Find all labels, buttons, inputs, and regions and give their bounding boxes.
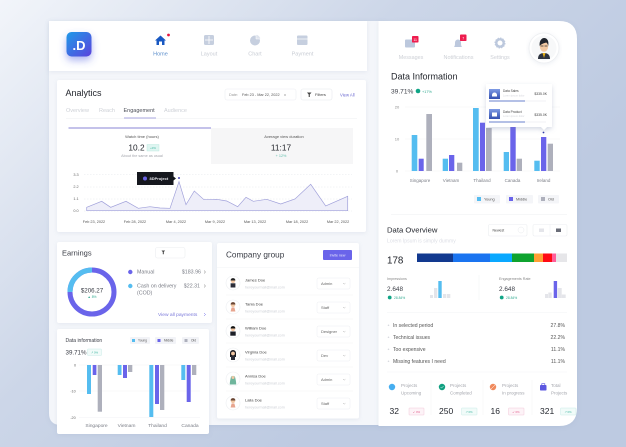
- bar chart: data information: Singapore: [410, 178, 431, 183]
- project stat: completed: 250: [439, 406, 453, 416]
- heading: earnings: Earnings: [62, 248, 92, 258]
- member: Annisa Doe: hereyourmail@mail.com: [245, 382, 285, 386]
- member: James Doe: hereyourmail@mail.com: [245, 286, 285, 290]
- bar chart: data information: 20: [395, 104, 400, 110]
- member: Virginia Doe: Dev: [321, 353, 328, 358]
- line chart: Feb 23, 2022: [83, 220, 105, 224]
- line chart: 0.0: [73, 209, 79, 213]
- project stat: in progress: 16: [490, 406, 500, 416]
- earnings filter: [156, 248, 185, 258]
- negative bar chart: Singapore: [85, 423, 108, 429]
- filters button: [301, 89, 332, 100]
- stat: engagements rate: 2.648: [499, 286, 515, 293]
- reasons list: 22.2%: [551, 335, 565, 341]
- nav item: payment: [292, 36, 314, 58]
- negative bar chart: Vietnam: [118, 423, 135, 429]
- panel: data information small: [57, 329, 209, 434]
- logo: [66, 32, 92, 56]
- member: James Doe: Admin: [321, 281, 332, 286]
- stat: impressions: 28.84%: [394, 296, 405, 300]
- member: William Doe: Designer: [321, 329, 338, 334]
- reasons list: [388, 323, 565, 365]
- metric: average view duration: Average view duration: [264, 134, 304, 139]
- icon: messages: [399, 36, 424, 61]
- data product row: [489, 109, 548, 122]
- legend: Young: [138, 339, 147, 343]
- filters button: Filters: [315, 92, 326, 97]
- nav item: payment: Payment: [292, 52, 314, 58]
- right sidebar panel: [378, 21, 577, 426]
- heading: Data Overview: [387, 226, 438, 234]
- bar chart: data information: Ireland: [537, 178, 551, 183]
- nav item: home: Home: [153, 52, 168, 58]
- data sales row: $335.0K: [534, 92, 548, 96]
- icon: notifications: Notifications: [444, 55, 474, 61]
- negative bar chart: Canada: [181, 423, 199, 429]
- bar chart: data information: Vietnam: [443, 178, 459, 183]
- metric: watch time: 10.2: [128, 142, 145, 152]
- line chart: Mar 13, 2022: [244, 220, 266, 224]
- member: Annisa Doe: Annisa Doe: [245, 374, 266, 378]
- icon: messages: Messages: [399, 55, 424, 61]
- line chart: Feb 28, 2022: [124, 220, 146, 224]
- view toggle: [533, 224, 567, 236]
- stat: impressions: [387, 277, 450, 300]
- data product row: Data Product: [503, 110, 522, 114]
- earnings legend: $22.31: [184, 284, 200, 290]
- member: Tania Doe: Tania Doe: [245, 302, 264, 306]
- member: Laila Doe: Laila Doe: [245, 398, 263, 402]
- chart legend: [474, 195, 559, 204]
- metric: average view duration: + 12%: [276, 154, 287, 158]
- legend: Old: [191, 339, 196, 343]
- project stat: completed: [439, 383, 477, 416]
- reasons list: Missing features I need: [393, 359, 446, 365]
- invite button: [323, 250, 352, 260]
- tabs: Audience: [164, 108, 187, 114]
- member: Laila Doe: Staff: [321, 401, 330, 406]
- heading: Data information: [66, 338, 102, 344]
- tabs: Engagement: [124, 108, 155, 114]
- sort dropdown: [488, 224, 527, 236]
- invite button: Invite new: [330, 254, 346, 258]
- donut chart: $206.27: [81, 288, 104, 294]
- member: Virginia Doe: [226, 348, 350, 362]
- nav item: layout: Layout: [201, 52, 218, 58]
- member: James Doe: James Doe: [245, 278, 266, 282]
- project stat: in progress: [490, 383, 525, 416]
- stat: impressions: 2.648: [387, 286, 403, 293]
- percent value: ↗ 0%: [91, 350, 99, 354]
- project stat: total: 321: [540, 406, 554, 416]
- project stat: total: Projects: [551, 390, 568, 396]
- project stat: total: Total: [551, 383, 561, 388]
- member: William Doe: hereyourmail@mail.com: [245, 334, 285, 338]
- bar chart: data information: 0: [396, 168, 399, 174]
- member: Tania Doe: hereyourmail@mail.com: [245, 310, 285, 314]
- project stat: in progress: Projects: [502, 383, 519, 388]
- data sales row: Lorem ipsum dolor: [503, 94, 525, 98]
- user avatar: [529, 33, 559, 63]
- stat: engagements rate: 28.84%: [506, 296, 517, 300]
- earnings legend: Cash on delivery: [137, 284, 177, 290]
- heading: analytics: Analytics: [66, 88, 102, 98]
- chart tooltip: 8DProject: [150, 176, 169, 181]
- subtitle: Lorem Ipsum is simply dummy: [387, 238, 456, 244]
- chart legend: Old: [548, 198, 554, 202]
- chart legend: Middle: [516, 198, 527, 202]
- donut chart: [70, 270, 114, 314]
- date picker: Feb 23 - Mar 22, 2022: [242, 93, 280, 97]
- negative bar chart: [70, 364, 200, 429]
- project stat: upcoming: Upcoming: [401, 390, 422, 396]
- member: Annisa Doe: [226, 372, 350, 386]
- member: Tania Doe: Staff: [321, 305, 330, 310]
- nav item: chart: Chart: [248, 52, 262, 58]
- data sales row: Data Sales: [503, 89, 519, 93]
- line chart: Mar 9, 2022: [205, 220, 225, 224]
- member: Laila Doe: [226, 396, 350, 410]
- bar chart: data information: 10: [395, 136, 400, 142]
- stat: engagements rate: Engagements Rate: [499, 277, 531, 281]
- legend: [130, 337, 199, 344]
- panel: analytics: [57, 80, 366, 232]
- negative bar chart: 0: [74, 364, 76, 368]
- metric: average view duration: 11:17: [271, 142, 291, 152]
- chart tooltip: [137, 172, 180, 185]
- bar chart: data information: Canada: [505, 178, 521, 183]
- view all payments link: View all payments: [158, 312, 198, 318]
- member: Virginia Doe: Virginia Doe: [245, 350, 267, 354]
- member: Annisa Doe: Admin: [321, 377, 332, 382]
- view all link: View All: [340, 92, 355, 98]
- data product row: Lorem ipsum dolor: [503, 114, 525, 118]
- stat: impressions: Impressions: [387, 277, 407, 281]
- earnings legend: (COD): [137, 290, 153, 296]
- project stat: upcoming: ↙ 0%: [413, 410, 421, 414]
- heading: Company group: [226, 250, 285, 260]
- view all payments link: [158, 312, 206, 318]
- bar chart: data information: Thailand: [473, 178, 491, 183]
- percent value: [66, 349, 102, 356]
- total value: 178: [387, 256, 404, 266]
- date picker: [225, 89, 296, 100]
- member: Tania Doe: [226, 300, 350, 314]
- percent value with trend: +17%: [422, 90, 432, 94]
- metric: watch time: +0%: [150, 146, 156, 150]
- member: William Doe: William Doe: [245, 326, 267, 330]
- earnings legend: Manual: [137, 270, 154, 276]
- project stat: total: ↗ 0%: [564, 410, 572, 414]
- sidebar header icons: [399, 33, 559, 63]
- reasons list: 11.1%: [551, 347, 565, 353]
- percent value: 39.71%: [66, 350, 87, 356]
- heading: data information: Data Information: [391, 72, 458, 82]
- legend: Middle: [164, 339, 174, 343]
- member: Virginia Doe: hereyourmail@mail.com: [245, 358, 285, 362]
- logo: .D: [72, 38, 86, 53]
- reasons list: 11.1%: [551, 359, 565, 365]
- line chart: Mar 18, 2022: [286, 220, 308, 224]
- icon: messages: 11: [413, 38, 417, 42]
- metric: watch time: About the same as usual: [121, 154, 163, 158]
- popup: data cards: [486, 84, 552, 130]
- line chart: 3.3: [73, 173, 79, 177]
- metric: average view duration: [211, 128, 353, 164]
- tabs: Reach: [99, 108, 115, 114]
- member: William Doe: [226, 324, 350, 338]
- panel: company group: [217, 243, 359, 418]
- line chart: 1.1: [73, 197, 79, 201]
- earnings legend: [128, 270, 206, 296]
- project stat: completed: Completed: [450, 390, 472, 396]
- project stat: in progress: In progress: [502, 390, 525, 396]
- negative bar chart: -10: [70, 390, 76, 394]
- project stat: completed: Projects: [450, 383, 467, 388]
- icon: notifications: [444, 34, 474, 61]
- dashboard left background panel: [49, 21, 385, 425]
- project stat: upcoming: [389, 383, 424, 416]
- negative bar chart: Thailand: [148, 423, 167, 429]
- metric: watch time: [68, 128, 211, 158]
- reasons list: 27.8%: [551, 323, 565, 329]
- negative bar chart: -20: [70, 416, 76, 420]
- top navigation bar: [49, 21, 367, 71]
- project stat: total: [540, 383, 576, 416]
- donut chart: ▲ 8%: [88, 295, 97, 299]
- line chart: 2.2: [73, 185, 79, 189]
- icon: settings: [490, 38, 510, 61]
- member: James Doe: [226, 276, 350, 290]
- stacked bar: [417, 254, 567, 262]
- tabs: Overview: [66, 108, 89, 114]
- nav item: home: [153, 34, 170, 58]
- data sales row: [489, 89, 548, 101]
- date picker: Date:: [229, 93, 238, 97]
- member: Laila Doe: hereyourmail@mail.com: [245, 406, 285, 410]
- bar chart: data information: [395, 104, 560, 183]
- stat: engagements rate: [499, 277, 566, 300]
- data product row: $335.0K: [534, 113, 548, 117]
- line chart: Mar 4, 2022: [166, 220, 186, 224]
- panel: earnings: [57, 242, 212, 323]
- percent value with trend: 39.71%: [391, 88, 414, 96]
- chart legend: Young: [484, 198, 495, 202]
- sort dropdown: Newest: [492, 228, 504, 232]
- tabs: [66, 108, 357, 118]
- section: data overview: [387, 224, 576, 416]
- project stat: completed: ↗ 0%: [465, 410, 473, 414]
- reasons list: Technical issues: [393, 335, 431, 341]
- nav item: layout: [201, 35, 218, 58]
- percent value with trend: [391, 88, 432, 96]
- project stat: upcoming: 32: [390, 406, 399, 416]
- line chart: [73, 172, 352, 224]
- line chart: Mar 22, 2022: [327, 220, 349, 224]
- earnings legend: $183.96: [182, 270, 201, 276]
- reasons list: Too expensive: [393, 347, 426, 353]
- nav item: chart: [248, 34, 262, 58]
- project stat: upcoming: Projects: [401, 383, 418, 388]
- metric: watch time: Watch time (hours): [125, 134, 159, 139]
- icon: settings: Settings: [490, 55, 510, 61]
- icon: notifications: 7: [462, 36, 464, 40]
- project stat: in progress: ↙ 0%: [512, 410, 520, 414]
- reasons list: In selected period: [393, 323, 433, 329]
